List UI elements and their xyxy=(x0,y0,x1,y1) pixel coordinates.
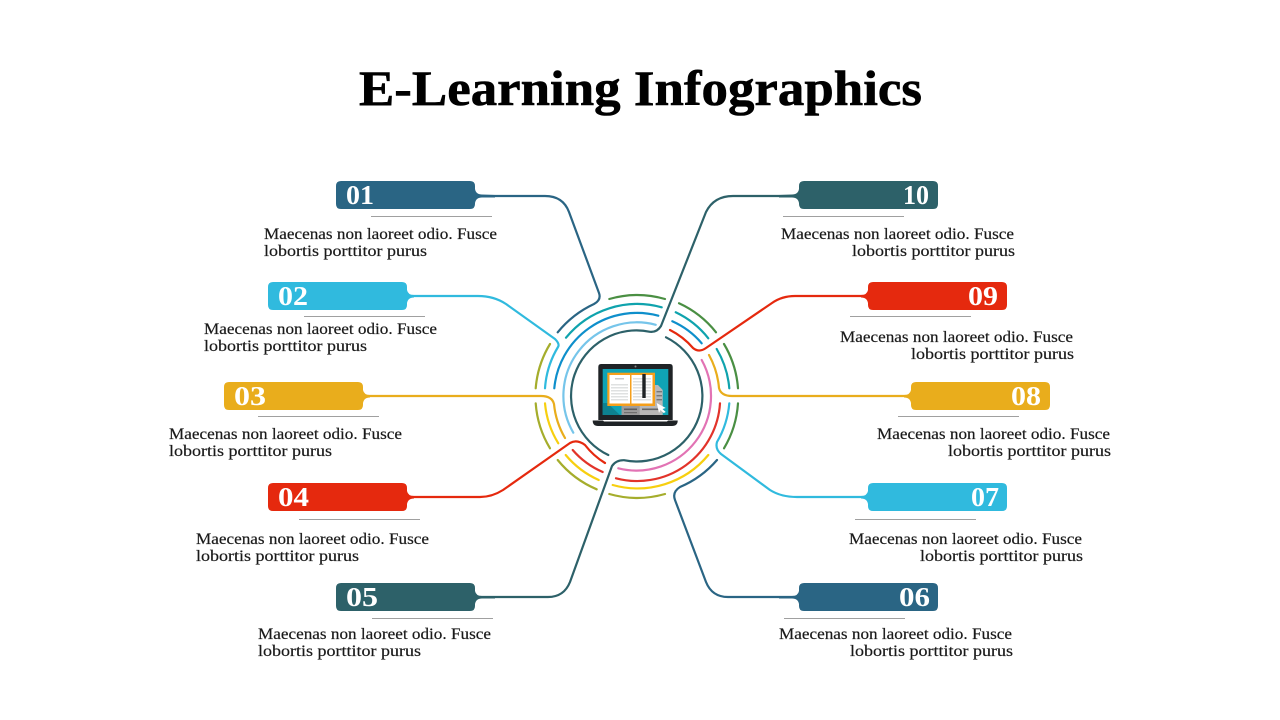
item 01 xyxy=(264,180,600,332)
text 04 xyxy=(196,531,429,565)
text 02: lobortis porttitor purus xyxy=(204,338,367,355)
text 01 xyxy=(264,226,497,260)
text 10: Maecenas non laoreet odio. Fusce xyxy=(781,226,1014,243)
text 03: lobortis porttitor purus xyxy=(169,443,332,460)
connector 05 xyxy=(476,337,702,597)
text 09: lobortis porttitor purus xyxy=(911,346,1074,363)
number 04: 04 xyxy=(278,482,309,512)
label pill 09 xyxy=(861,282,1007,310)
item 09 xyxy=(670,281,1074,363)
connector 01 xyxy=(476,196,600,332)
text 05 xyxy=(258,626,491,660)
text 01: lobortis porttitor purus xyxy=(264,243,427,260)
item 02 xyxy=(204,281,559,388)
text 06 xyxy=(779,626,1013,660)
number 05: 05 xyxy=(346,582,378,612)
number 08: 08 xyxy=(1011,381,1041,411)
text 01: Maecenas non laoreet odio. Fusce xyxy=(264,226,497,243)
text 08 xyxy=(877,426,1111,460)
text 07: Maecenas non laoreet odio. Fusce xyxy=(849,531,1082,548)
text 03: Maecenas non laoreet odio. Fusce xyxy=(169,426,402,443)
number 10: 10 xyxy=(903,180,929,210)
text 07 xyxy=(849,531,1083,565)
number 09: 09 xyxy=(968,281,998,311)
text 10: lobortis porttitor purus xyxy=(852,243,1015,260)
label pill 03 xyxy=(224,382,370,410)
number 02: 02 xyxy=(278,281,308,311)
connector 06 xyxy=(674,460,798,597)
text 06: lobortis porttitor purus xyxy=(850,643,1013,660)
title: E-Learning Infographics xyxy=(359,60,922,116)
label pill 02 xyxy=(268,282,414,310)
number 07: 07 xyxy=(971,482,999,512)
item 03 xyxy=(169,381,565,460)
connector 08 xyxy=(709,355,910,396)
text 03 xyxy=(169,426,402,460)
label pill 08 xyxy=(904,382,1050,410)
connector 04 xyxy=(408,441,605,497)
connector 07 xyxy=(716,403,867,497)
connector 02 xyxy=(408,296,559,388)
label pill 10 xyxy=(779,181,938,209)
number 03: 03 xyxy=(234,381,266,411)
number 06: 06 xyxy=(899,582,930,612)
text 02 xyxy=(204,321,437,355)
connector 10 xyxy=(571,196,798,455)
item 10 xyxy=(571,180,1015,455)
text 04: lobortis porttitor purus xyxy=(196,548,359,565)
text 09 xyxy=(840,329,1074,363)
text 06: Maecenas non laoreet odio. Fusce xyxy=(779,626,1012,643)
label pill 06 xyxy=(779,583,938,611)
number 01: 01 xyxy=(346,180,374,210)
text 05: Maecenas non laoreet odio. Fusce xyxy=(258,626,491,643)
label pill 01 xyxy=(336,181,495,209)
text 08: lobortis porttitor purus xyxy=(948,443,1111,460)
text 10 xyxy=(781,226,1015,260)
concentric ring arcs xyxy=(536,295,738,498)
item 05 xyxy=(258,337,702,660)
text 05: lobortis porttitor purus xyxy=(258,643,421,660)
text 09: Maecenas non laoreet odio. Fusce xyxy=(840,329,1073,346)
item 06 xyxy=(674,460,1013,660)
item 08 xyxy=(709,355,1111,460)
label pill 04 xyxy=(268,483,414,511)
label pill 05 xyxy=(336,583,495,611)
connector 03 xyxy=(364,396,565,438)
item 07 xyxy=(716,403,1083,565)
text 04: Maecenas non laoreet odio. Fusce xyxy=(196,531,429,548)
icon: laptop with open book xyxy=(593,364,678,426)
text 02: Maecenas non laoreet odio. Fusce xyxy=(204,321,437,338)
label pill 07 xyxy=(861,483,1007,511)
item 04 xyxy=(196,441,605,565)
connector 09 xyxy=(670,296,867,350)
text 08: Maecenas non laoreet odio. Fusce xyxy=(877,426,1110,443)
text 07: lobortis porttitor purus xyxy=(920,548,1083,565)
